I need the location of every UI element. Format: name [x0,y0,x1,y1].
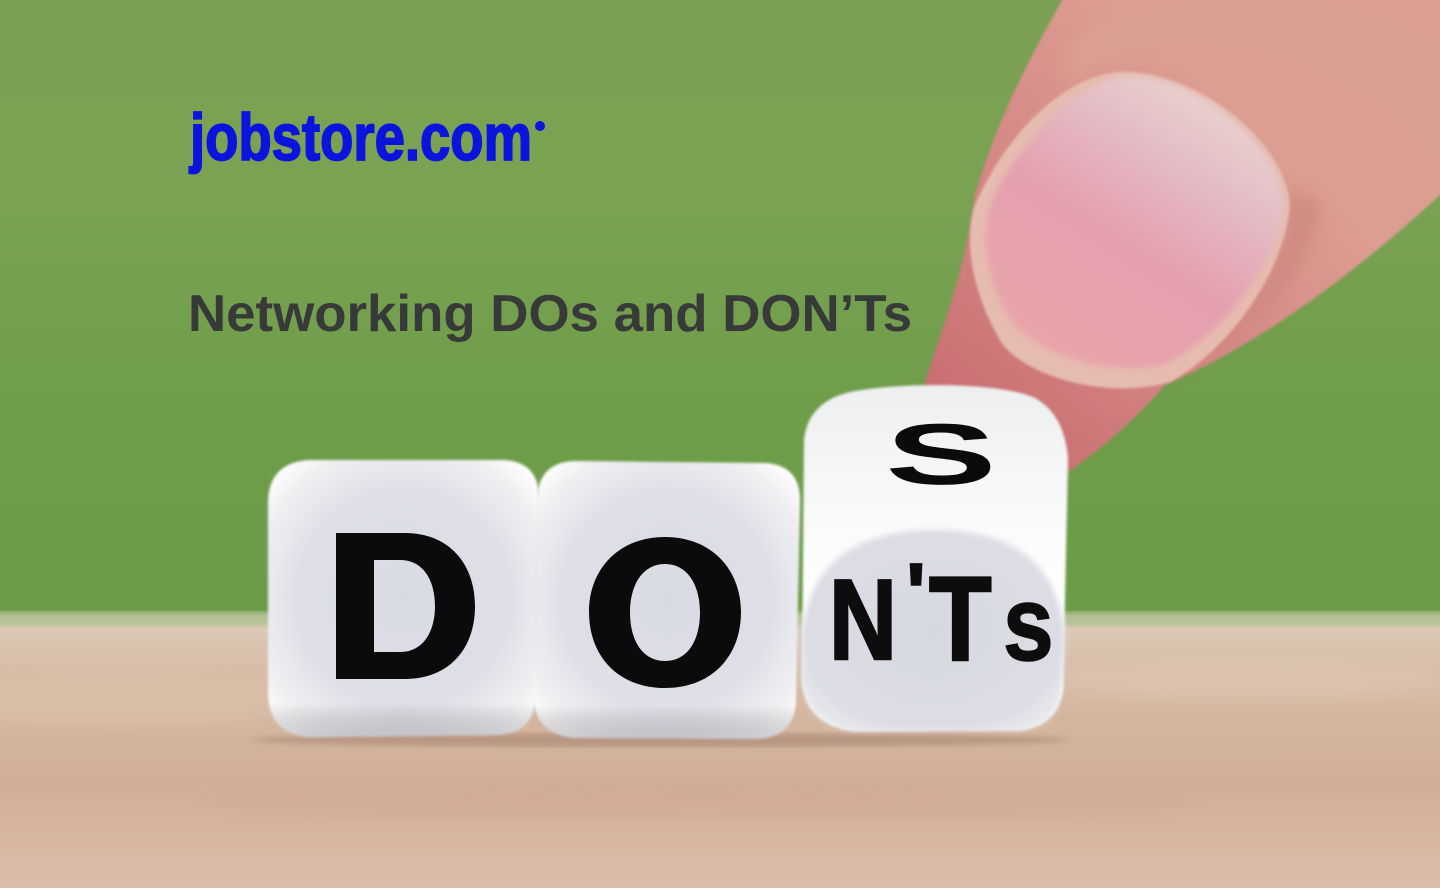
skin highlight [1060,0,1440,180]
letter O [589,537,741,688]
letters N'Ts on die front [829,546,1054,686]
logo: jobstore.com: jobstore.com [188,100,532,174]
die: letter O [533,461,800,739]
letter S on die top: S [885,406,997,503]
letter T: T [929,552,992,686]
die: letter D [268,460,539,737]
background: green wall [0,0,1440,625]
cuticle rim [970,72,1290,388]
fingernail [986,76,1284,368]
apostrophe: ' [906,546,926,640]
letter D [336,533,475,679]
letter s: s [1003,565,1054,683]
finger with nail [925,0,1440,472]
skin dark crease [1170,190,1320,375]
background: wooden table [0,612,1440,888]
die: rotated S and N'Ts [802,385,1068,731]
title: Networking DOs and DON’Ts [188,285,912,343]
letter N: N [829,556,897,684]
